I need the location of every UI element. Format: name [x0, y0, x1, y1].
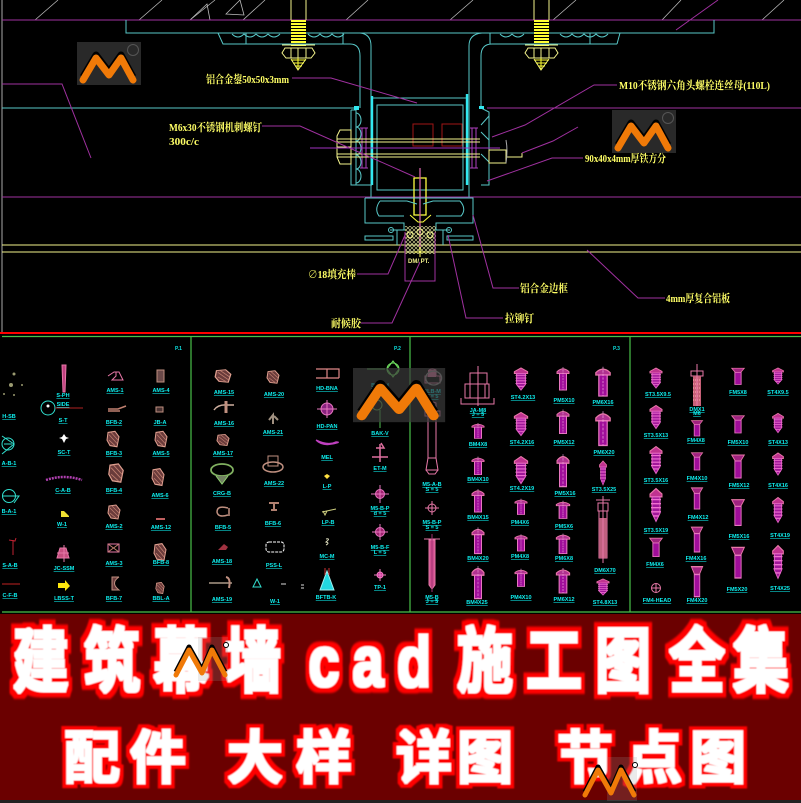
item: d = 5 [374, 511, 386, 517]
item [2, 436, 16, 467]
item: BAK-H [371, 383, 389, 389]
central tube [372, 94, 467, 190]
screw: ST3.5X19 [644, 528, 668, 534]
threaded bolt: DMX1 [689, 407, 705, 413]
item [371, 400, 389, 437]
screw: PM6X16 [592, 400, 614, 406]
screw: FM5X8 [729, 390, 747, 396]
expansion bolt [422, 402, 442, 493]
screw [644, 489, 668, 534]
screw [644, 405, 668, 439]
item [253, 579, 304, 605]
item: AMS-4 [152, 388, 170, 394]
item [106, 372, 124, 394]
screw: PM6X8 [555, 556, 573, 562]
item [107, 431, 119, 447]
through bolts [337, 139, 480, 157]
item [214, 370, 234, 396]
item [209, 577, 232, 603]
cross: S = 5 [426, 525, 438, 531]
item: AMS-1 [106, 388, 124, 394]
item [211, 464, 233, 497]
long bolt [594, 496, 616, 574]
screw [645, 368, 671, 398]
red divider [0, 332, 801, 334]
item [152, 370, 170, 394]
item: AMS-22 [264, 481, 284, 487]
item [316, 440, 338, 461]
callout: stainless machine screw: M6x30不锈钢机刺螺钉 [169, 120, 262, 134]
item [109, 464, 123, 482]
item: AMS-20 [264, 392, 284, 398]
item [54, 545, 75, 572]
threaded bolt: M6 [693, 411, 701, 417]
heading: subtitle: 配件大样详图节点图 [64, 726, 746, 790]
item [320, 539, 335, 560]
screw [555, 534, 573, 562]
callout: composite panel: 4mm厚复合铝板 [666, 291, 730, 305]
screw [511, 534, 529, 560]
backer rod and sealant [405, 226, 436, 281]
screw [510, 569, 532, 601]
item: C-F-B [3, 593, 18, 599]
hex bolt: JA-M8 [470, 408, 486, 414]
callout: stainless machine screw: 300c/c [169, 136, 199, 148]
screw [770, 498, 790, 539]
item [2, 538, 18, 569]
aluminium extrusion [365, 198, 473, 245]
screw [553, 367, 575, 404]
screw: FM4X20 [687, 598, 707, 604]
screw: PM5X16 [554, 491, 576, 497]
item: HD-BNA [316, 386, 338, 392]
screw: PM4X10 [510, 595, 532, 601]
item [154, 544, 166, 560]
label: AMS-5 [152, 451, 170, 457]
item [316, 369, 339, 392]
screw: BM4X10 [467, 477, 489, 483]
anchor: S = 5 [426, 394, 438, 400]
item: S-PH [56, 393, 70, 399]
watermark logo 5 [585, 757, 638, 801]
screw [729, 500, 749, 540]
item [372, 443, 388, 472]
screw: ST3.5X16 [644, 478, 668, 484]
item [213, 434, 233, 457]
sheet numbers: P.2 [394, 346, 401, 352]
item [317, 400, 338, 430]
screw [466, 566, 488, 606]
item: M5-B-F [371, 545, 390, 551]
screw: FM4X16 [686, 556, 706, 562]
screw [467, 489, 489, 521]
item: B-A-1 [2, 509, 16, 515]
screw [646, 538, 664, 568]
screw [553, 410, 575, 446]
item: AMS-15 [214, 390, 234, 396]
leader lines [2, 0, 718, 323]
item: LP-B [322, 520, 334, 526]
screw: FM5X16 [729, 534, 749, 540]
crosshead: FM4-HEAD [643, 598, 671, 604]
concrete hatch strokes [35, 0, 784, 20]
screw [593, 579, 617, 606]
item [156, 582, 164, 594]
watermark logo 3 [353, 368, 445, 422]
panel 1: profile parts [2, 365, 171, 602]
item: CRG-B [213, 491, 231, 497]
item [264, 371, 284, 398]
screw [467, 527, 489, 562]
hex bolt [461, 366, 494, 418]
screw: ST4.2X13 [511, 395, 535, 401]
item [46, 477, 82, 494]
item: JC-SSM [54, 566, 75, 572]
item [263, 415, 283, 436]
item [57, 511, 69, 528]
screw: FM4X8 [687, 438, 705, 444]
item: BFB-6 [265, 521, 281, 527]
label: AMS-12 [151, 525, 171, 531]
screw: PM5X10 [553, 398, 575, 404]
screw [687, 421, 705, 444]
item [155, 431, 167, 447]
item: BAK-V [371, 431, 389, 437]
item [2, 584, 20, 599]
screw: PM5X12 [553, 440, 575, 446]
item: MC-M [320, 554, 335, 560]
screw [554, 454, 576, 497]
item: LBSS-T [54, 596, 75, 602]
screw [593, 411, 615, 456]
item [316, 568, 336, 601]
item [58, 434, 71, 456]
screw: BM4X15 [467, 515, 489, 521]
long bolt: DM6X70 [594, 568, 616, 574]
item [105, 544, 123, 567]
label: BFB-3 [106, 451, 122, 457]
item [215, 507, 231, 531]
item [106, 406, 126, 426]
panel 4: fasteners [643, 364, 790, 604]
T-bolt [414, 168, 426, 250]
item: H-SB [2, 414, 16, 420]
label: AMS-2 [105, 524, 123, 530]
item [214, 401, 234, 427]
screw: ST3.5X9.5 [645, 392, 671, 398]
item: SC-T [58, 450, 71, 456]
left bracket [218, 33, 371, 197]
item: L-P [323, 484, 332, 490]
callout: rivet: 拉铆钉 [505, 311, 534, 325]
right bracket [469, 33, 620, 197]
sheet numbers: P.3 [613, 346, 620, 352]
screw [727, 547, 747, 593]
screw [687, 567, 707, 604]
callout: aluminium square tube: 铝合金鋆50x50x3mm [206, 72, 289, 86]
threaded bolt [689, 364, 705, 417]
screw [511, 499, 529, 526]
item: BFB-5 [215, 525, 231, 531]
screw: ST4.8X13 [593, 600, 617, 606]
screw [511, 368, 535, 401]
item [371, 485, 390, 517]
sheet numbers: P.1 [175, 346, 182, 352]
item: BFTB-K [316, 595, 336, 601]
screw [510, 412, 534, 446]
item [2, 490, 19, 515]
screw [768, 413, 788, 446]
screw [592, 461, 616, 493]
anchor [423, 369, 441, 400]
frame left edge [1, 0, 3, 333]
screw: ST3.5X13 [644, 433, 668, 439]
bolt left [282, 0, 315, 70]
item: AMS-3 [105, 561, 123, 567]
item [322, 509, 336, 526]
screw: ST4.2X19 [510, 486, 534, 492]
item: C-A-B [55, 488, 71, 494]
left side plate and bolt head [337, 106, 372, 185]
watermark logo 4 [176, 637, 228, 681]
item: BFB-7 [106, 596, 122, 602]
item: L = 5 [374, 550, 386, 556]
screw: ST4.2X16 [510, 440, 534, 446]
screw [729, 368, 747, 396]
backer rod and sealant: DM/ PT. [408, 259, 430, 265]
callout: backer rod: ∅18填充棒 [308, 267, 356, 281]
right side plate and nut [470, 106, 522, 185]
item [56, 365, 70, 399]
item: TP-1 [374, 585, 386, 591]
pin: J = 5 [426, 599, 438, 605]
watermark logo 1 [77, 42, 141, 85]
screw: BM4X8 [469, 442, 487, 448]
label: BBL-A [152, 596, 170, 602]
item [108, 505, 120, 519]
label: BFB-8 [153, 560, 169, 566]
screw [592, 367, 614, 406]
item: M5-B-P [371, 506, 390, 512]
screw: BM4X20 [467, 556, 489, 562]
item [41, 401, 83, 424]
callout: weather sealant: 耐候胶 [331, 316, 362, 330]
item [156, 518, 165, 520]
screw [767, 368, 789, 396]
callout: stainless machine screw [169, 120, 262, 148]
grid frame [2, 336, 801, 612]
screw: PM4X6 [511, 520, 529, 526]
screw: BM4X25 [466, 600, 488, 606]
screw: PM6X20 [593, 450, 615, 456]
screw: ST4X16 [768, 483, 788, 489]
item [106, 577, 122, 602]
screw [688, 488, 708, 521]
screw: ST4X9.5 [767, 390, 789, 396]
screw [729, 455, 749, 489]
screw: PM5X6 [555, 524, 573, 530]
item: AMS-16 [214, 421, 234, 427]
callout: M10 bolt: M10不锈钢六角头螺栓连丝母(110L) [619, 78, 770, 92]
screw [687, 453, 707, 482]
pin [424, 534, 440, 605]
item: W-1 [270, 599, 280, 605]
expansion bolt: M5-A-B [422, 482, 442, 488]
item: MEL [321, 455, 333, 461]
screw [770, 546, 790, 592]
panel 2: gaskets and symbols [209, 361, 399, 605]
item [212, 544, 232, 565]
cross [423, 501, 442, 531]
structural lines [2, 20, 801, 252]
sheet numbers [175, 346, 620, 352]
screw: FM5X20 [727, 587, 747, 593]
screw [510, 457, 534, 492]
item [54, 580, 75, 602]
item [374, 569, 386, 591]
screw: ST4X13 [768, 440, 788, 446]
item: PSS-L [266, 563, 283, 569]
screw: FM4X12 [688, 515, 708, 521]
screw [555, 501, 573, 530]
item: AMS-19 [212, 597, 232, 603]
anchor: BLB-M [423, 389, 441, 395]
crosshead [643, 584, 671, 604]
item: AMS-21 [263, 430, 283, 436]
screw [469, 423, 487, 448]
screw [644, 447, 668, 484]
screw: PM4X8 [511, 554, 529, 560]
panel 3: fasteners [422, 366, 617, 606]
screw: FM4X10 [687, 476, 707, 482]
label: AMS-6 [151, 493, 169, 499]
item [266, 542, 284, 569]
screw: ST3.5X25 [592, 487, 616, 493]
item: W-1 [57, 522, 67, 528]
screw: ST4X19 [770, 533, 790, 539]
screw [467, 457, 489, 483]
screw [553, 568, 575, 603]
item: S-T [59, 418, 68, 424]
item: AMS-17 [213, 451, 233, 457]
screw [728, 416, 748, 446]
screw [686, 527, 706, 562]
hex bolt: J = 5 [472, 412, 484, 418]
item [323, 474, 332, 490]
item [367, 361, 399, 389]
item: ET-M [373, 466, 387, 472]
banner background [0, 614, 801, 800]
item: AMS-18 [212, 559, 232, 565]
cross: M5-B-P [423, 520, 442, 526]
panel: parts catalogue grid [2, 336, 801, 612]
item [265, 503, 281, 527]
bolt right [525, 0, 558, 70]
screw [768, 453, 788, 489]
screw: FM4X6 [646, 562, 664, 568]
heading: main title: 建筑幕墙cad施工图全集 [13, 623, 789, 702]
screw: PM6X12 [553, 597, 575, 603]
item: BFB-2 [106, 420, 122, 426]
screw: FM5X10 [728, 440, 748, 446]
item: HD-PAN [317, 424, 338, 430]
expansion bolt: S = 5 [426, 487, 438, 493]
item [263, 456, 284, 487]
bottom strip [0, 800, 801, 803]
watermark logo 2 [612, 110, 676, 153]
item: A-B-1 [2, 461, 16, 467]
screw: ST4X25 [770, 586, 790, 592]
panel: curtain wall section drawing [2, 0, 801, 333]
label: BFB-4 [106, 488, 123, 494]
pin: M5-B [425, 595, 439, 601]
item [371, 524, 390, 556]
item [154, 407, 166, 426]
item: SIDE [57, 402, 70, 408]
callout: steel square tube: 90x40x4mm厚铁方分 [585, 151, 666, 165]
item [152, 469, 164, 485]
scattered dots [3, 372, 23, 396]
item: S-A-B [2, 563, 18, 569]
screw: FM5X12 [729, 483, 749, 489]
callout: aluminium frame: 铝合金边框 [520, 281, 568, 295]
item: JB-A [154, 420, 166, 426]
